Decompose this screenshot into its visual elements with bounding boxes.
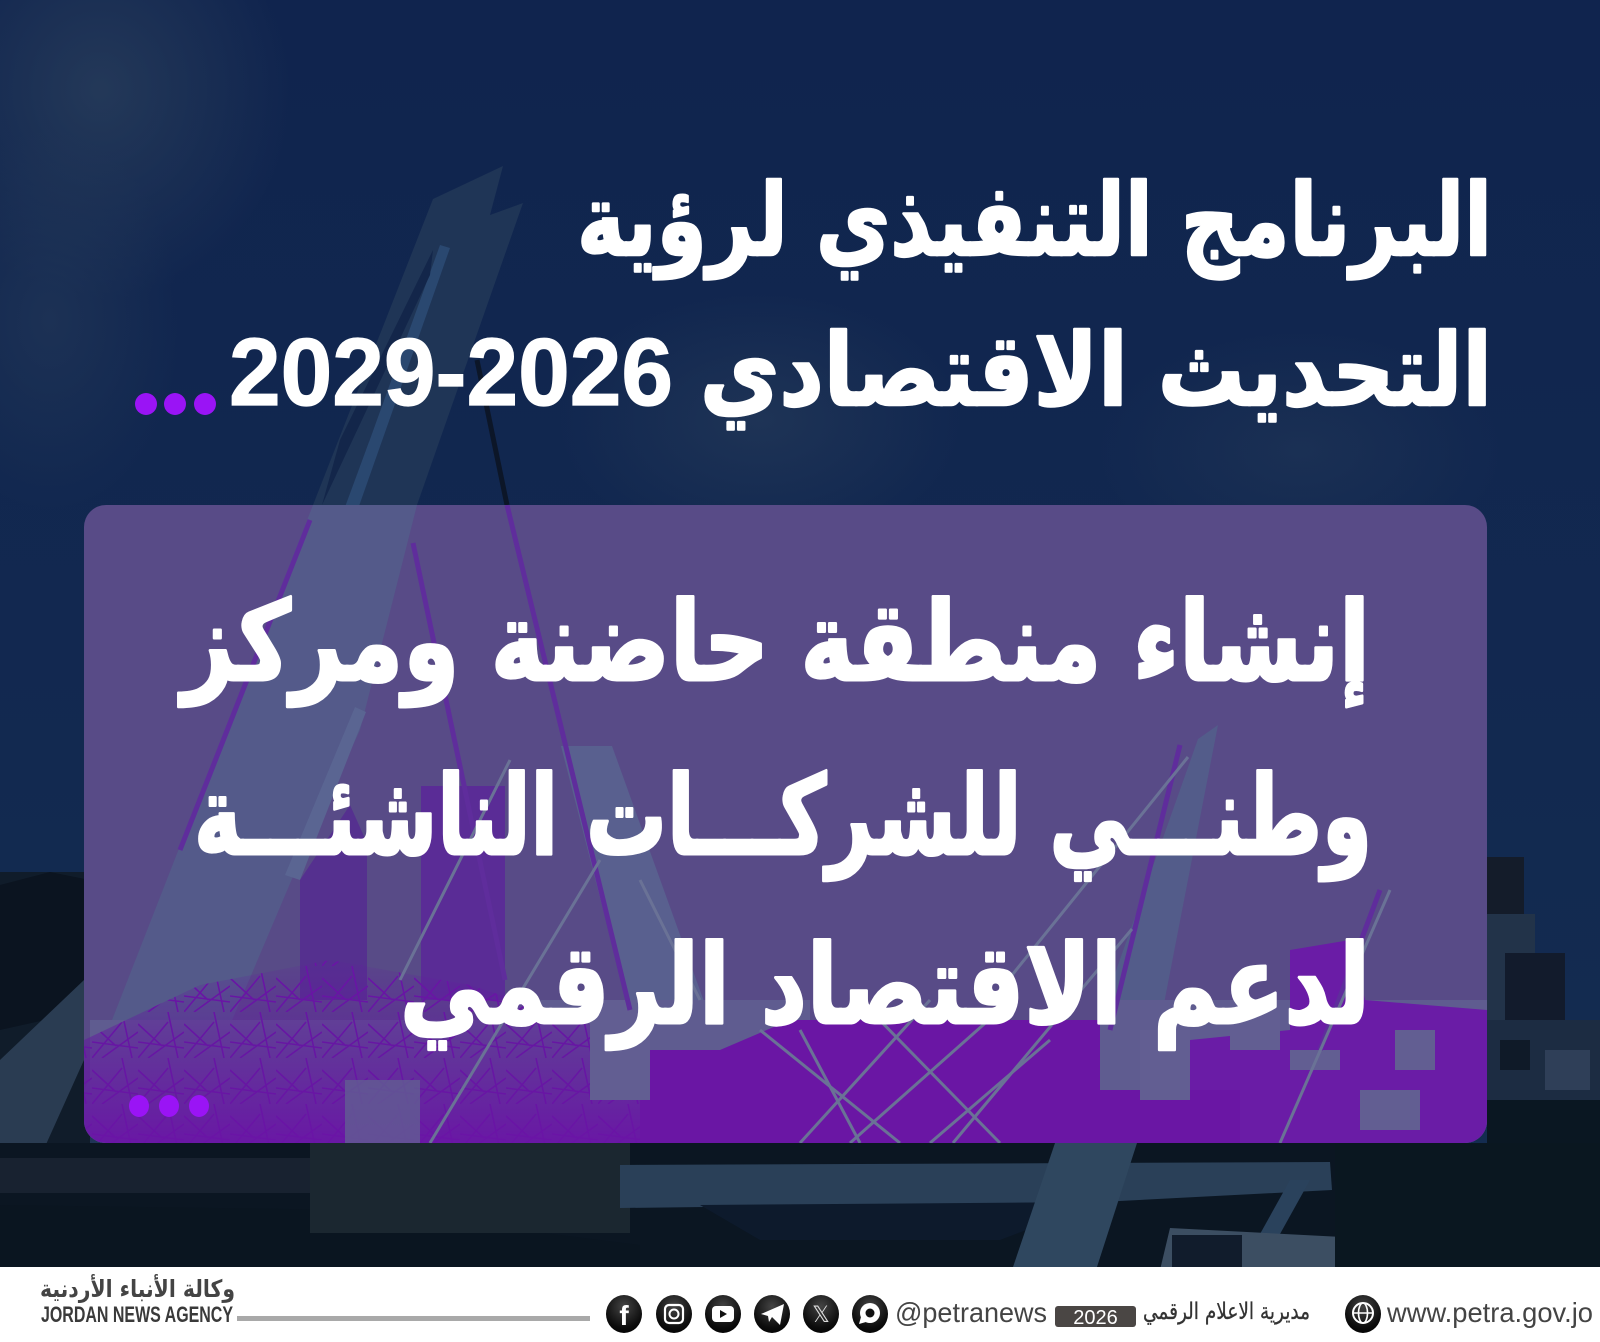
panel purple dots [129,1095,209,1117]
light buildings [345,1000,1435,1143]
pale cables [400,757,1390,1143]
icon: facebook: f [619,1300,629,1331]
year badge [1055,1306,1136,1329]
bridge pylon, left [0,166,523,1270]
agency name arabic: وكالة الأنباء الأردنية [40,1274,235,1303]
icon: telegram [754,1295,790,1333]
panel text [129,578,1372,1117]
handle: @petranews [895,1297,1047,1328]
title years: 2029-2026 [229,319,673,426]
clouds [0,0,1500,570]
icon: X [803,1295,839,1333]
icon: whatsapp [852,1295,888,1333]
panel line 3: لدعم الاقتصاد الرقمي [400,921,1370,1050]
title line 2: التحديث الاقتصادي [700,312,1492,429]
title purple dots [135,393,216,415]
light building mass [90,1000,1487,1143]
footer rule [237,1316,590,1321]
panel: translucent purple card over the photo [64,505,1487,1143]
icon: youtube [705,1295,741,1333]
purple cables [180,505,1380,1050]
agency name english: JORDAN NEWS AGENCY [41,1302,233,1327]
lower band: deck, trees and foreground walls [0,1143,1600,1270]
title [135,162,1492,429]
panel line 1: إنشاء منطقة حاضنة ومركز [178,578,1370,707]
footer bar [0,1267,1600,1342]
pylons inside panel [64,505,417,1143]
skyline, right edge [1487,857,1600,1270]
cable in the sky [477,360,507,505]
purple tree texture [84,960,640,1143]
directorate name: مديرية الاعلام الرقمي [1143,1299,1310,1325]
saturated skyline [640,1020,1100,1143]
skyline, left edge [0,872,90,1272]
icon: X: 𝕏 [812,1303,830,1328]
website: www.petra.gov.jo [1386,1297,1593,1328]
icon: instagram [656,1295,692,1333]
year badge: 2026 [1073,1307,1118,1329]
towers [421,786,505,1000]
icon: facebook [606,1295,642,1333]
icon: globe [1345,1295,1381,1333]
